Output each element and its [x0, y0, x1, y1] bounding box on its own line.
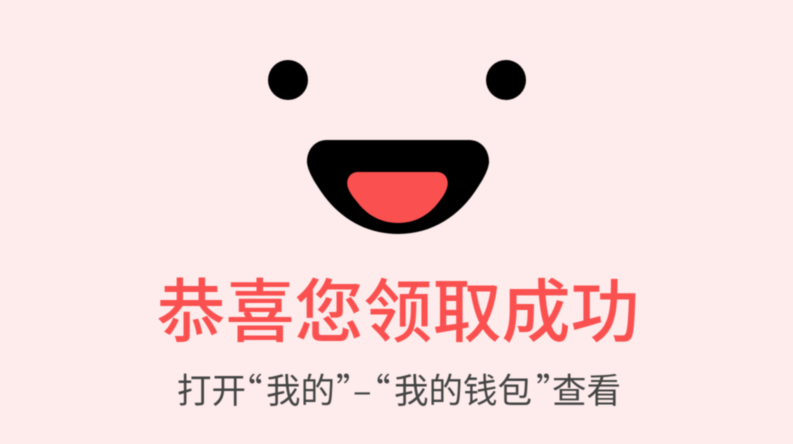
subtitle instruction: 查看: [552, 363, 621, 413]
subtitle instruction: –: [353, 363, 372, 413]
title: 恭喜您领取成功: [156, 256, 640, 356]
subtitle instruction: “: [228, 363, 262, 413]
icon: mouth: [307, 140, 489, 234]
icon: right eye: [486, 60, 526, 100]
subtitle instruction: 我的钱包: [394, 363, 532, 413]
icon: left eye: [268, 60, 308, 100]
subtitle instruction: “: [356, 363, 390, 413]
icon: tongue: [347, 172, 448, 223]
icon: smiling face: [267, 59, 527, 235]
subtitle instruction: 我的: [266, 363, 335, 413]
subtitle instruction: ”: [336, 363, 370, 413]
subtitle instruction: 打开: [177, 363, 246, 413]
subtitle instruction: [177, 363, 621, 413]
subtitle instruction: ”: [536, 363, 570, 413]
